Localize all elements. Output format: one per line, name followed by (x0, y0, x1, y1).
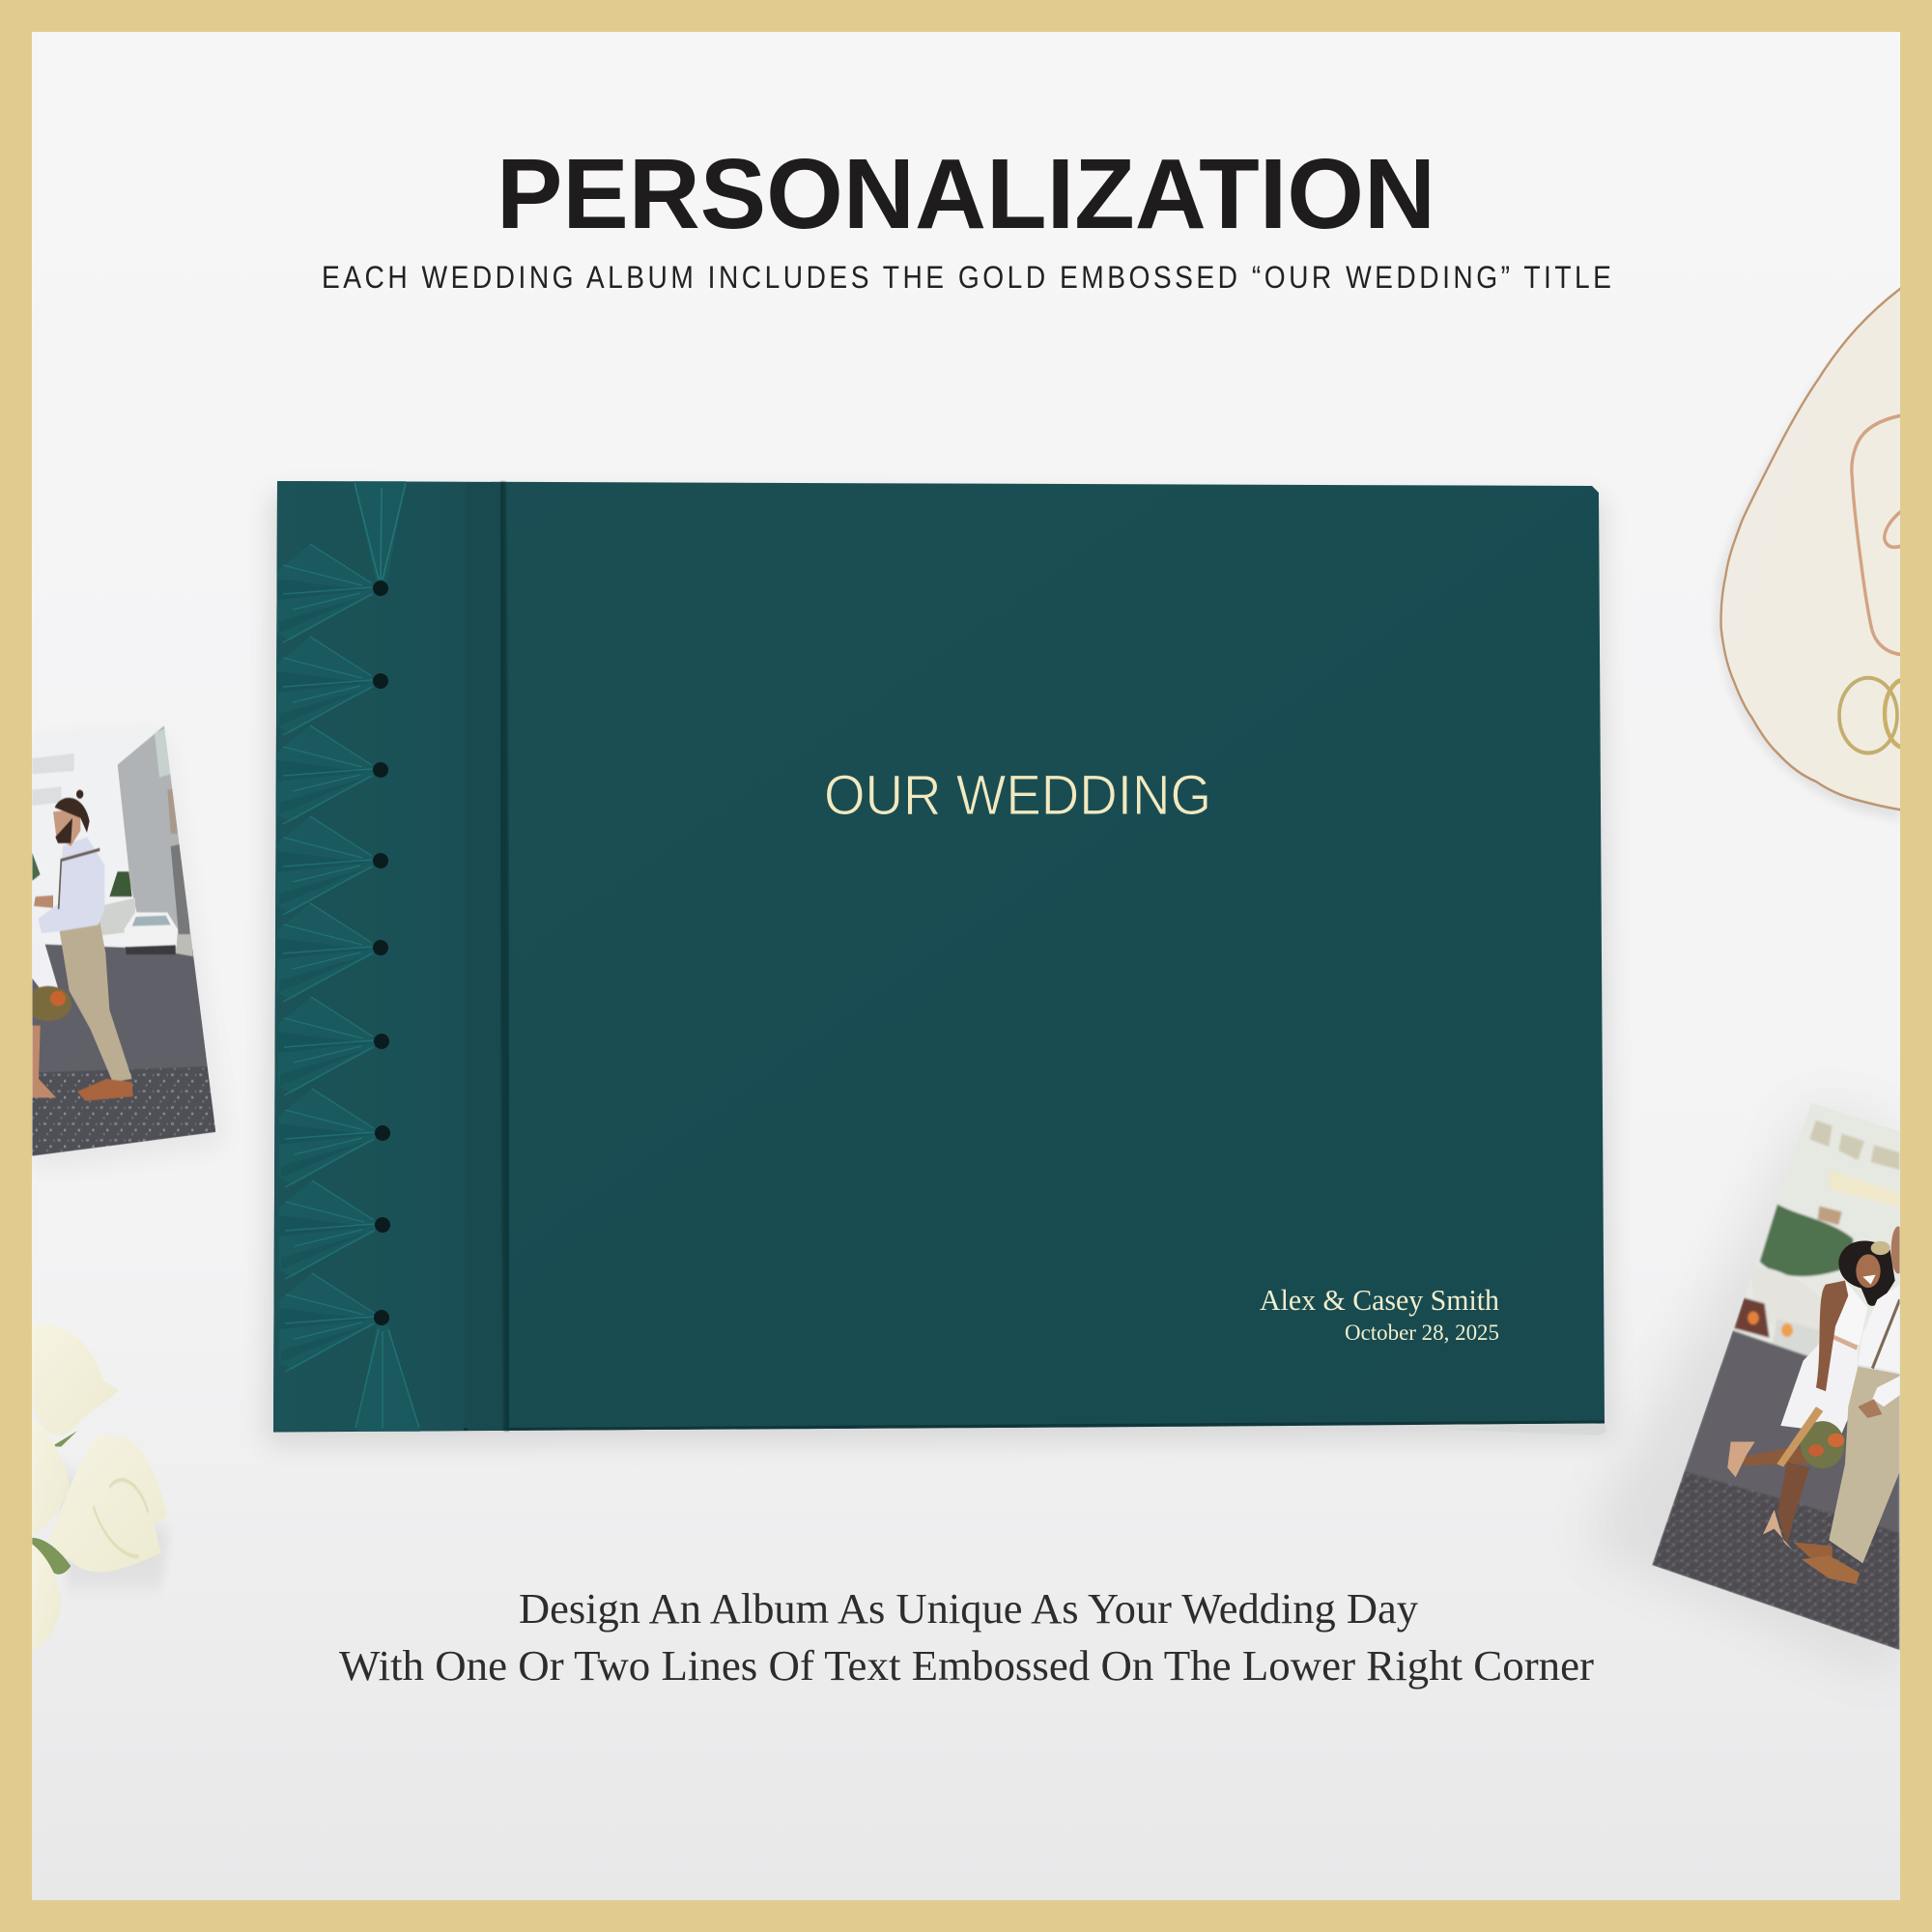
photo shadows (32, 734, 1900, 1681)
bouquet in right photo (1776, 1406, 1844, 1468)
rose four (32, 1544, 61, 1651)
album page block (1449, 1422, 1606, 1435)
photo: couple on right (1649, 1097, 1906, 1650)
subtitle: EACH WEDDING ALBUM INCLUDES THE GOLD EMBOSSED “OUR WEDDING” TITLE (322, 261, 1611, 295)
ceramic ring dish (1715, 288, 1900, 819)
dish body (1721, 287, 1903, 810)
album (273, 481, 1606, 1435)
title: PERSONALIZATION (497, 138, 1435, 249)
right photo background (1649, 1097, 1906, 1650)
caption line two: With One Or Two Lines Of Text Embossed On The Lower Right Corner (339, 1642, 1594, 1690)
dish line art (1852, 415, 1903, 655)
white car in left photo (124, 912, 178, 954)
green leaves (32, 1431, 77, 1575)
rose two (32, 1418, 70, 1535)
groom in right photo (1794, 1226, 1905, 1584)
album shadow (267, 493, 1611, 1444)
album names emboss: Alex & Casey Smith (1260, 1283, 1499, 1317)
spine groove (464, 482, 508, 1431)
binding threads (277, 544, 376, 1372)
caption line one: Design An Album As Unique As Your Wedding Day (519, 1585, 1418, 1633)
rose shadow (61, 1473, 166, 1584)
top thread (354, 481, 406, 585)
cover edges (273, 1422, 1605, 1431)
bride in right photo (1727, 1240, 1895, 1551)
bride figure partial (32, 895, 71, 1098)
album cover (273, 481, 1605, 1432)
album title emboss: OUR WEDDING (824, 764, 1211, 827)
rose one (32, 1323, 119, 1435)
gold rings (1837, 676, 1900, 755)
album date emboss: October 28, 2025 (1345, 1321, 1499, 1345)
rose three (48, 1434, 167, 1572)
spine panel (273, 481, 464, 1432)
groom figure (34, 790, 133, 1101)
photo: groom and bride on left (25, 721, 219, 1173)
binding holes (373, 581, 390, 1325)
dish shadow (1715, 437, 1900, 819)
white roses (32, 1323, 171, 1651)
bottom thread (355, 1325, 420, 1432)
left photo background (32, 721, 219, 1173)
